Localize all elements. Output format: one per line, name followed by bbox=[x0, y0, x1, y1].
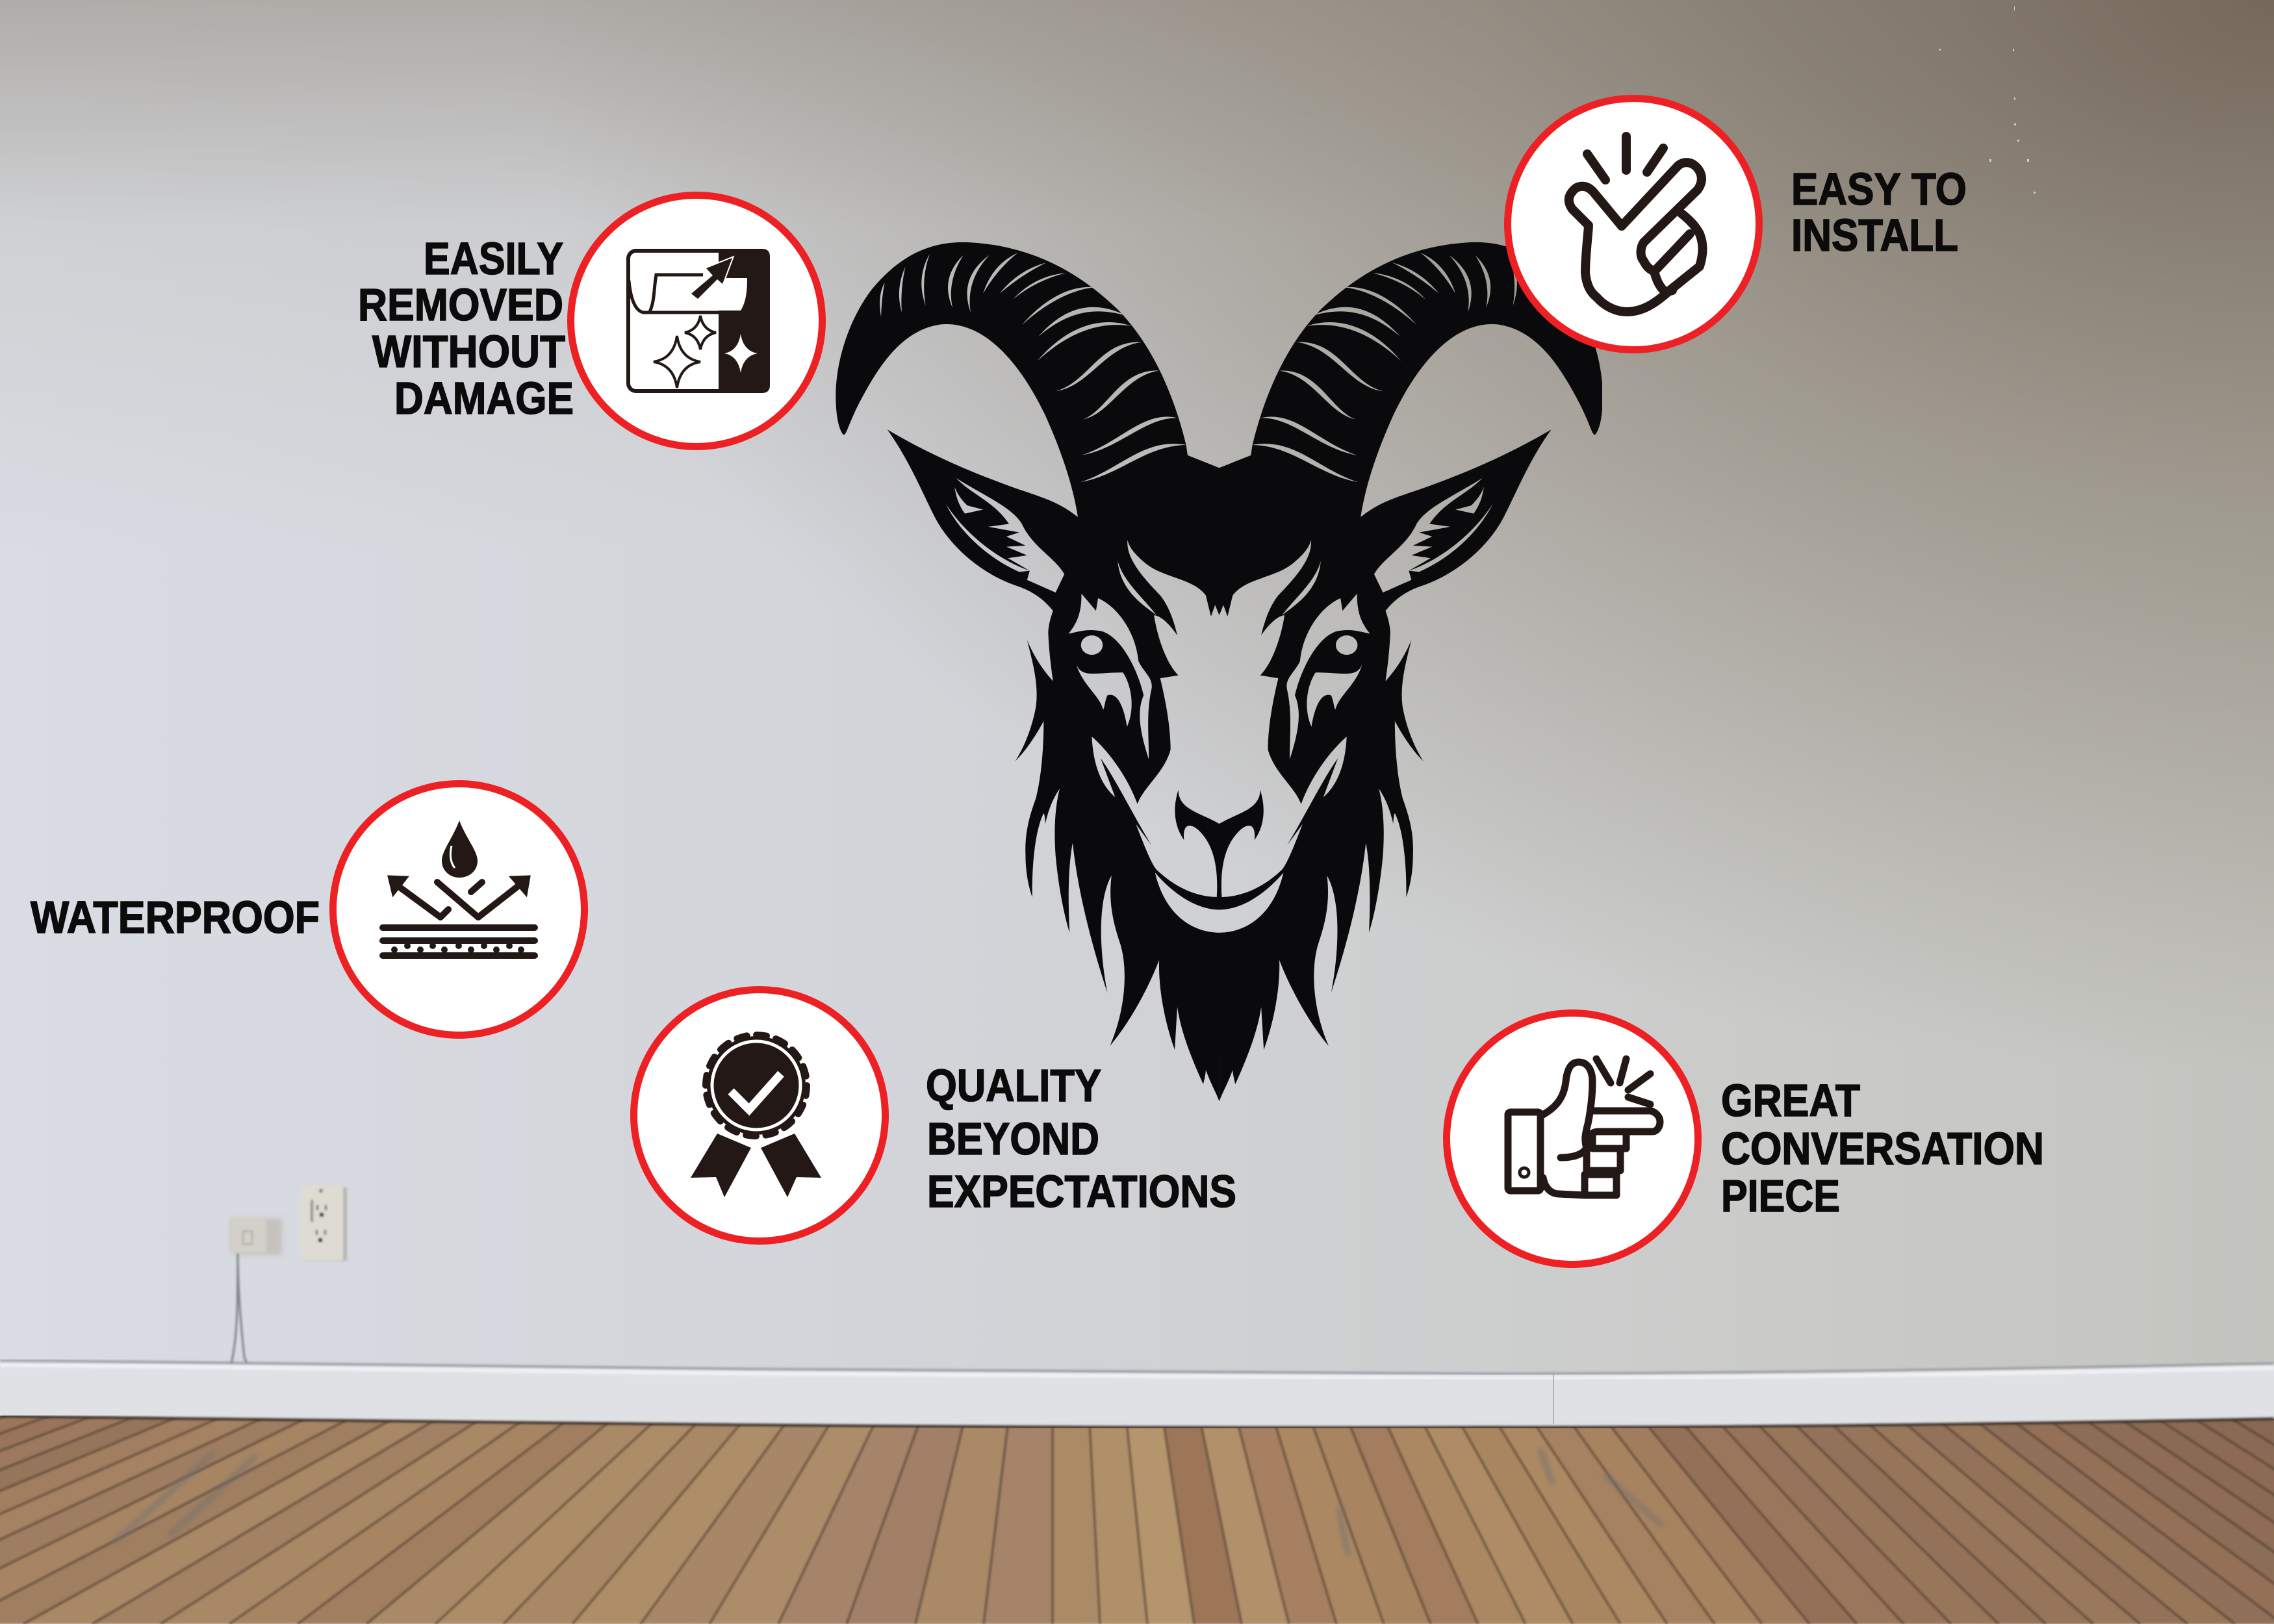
icon: award rosette bbox=[691, 1032, 821, 1197]
feature: quality beyond expectations bbox=[634, 990, 1236, 1241]
label: great conversation piece bbox=[1721, 1075, 2044, 1221]
label: easily removed without damage: REMOVED bbox=[358, 279, 563, 330]
badge circle bbox=[634, 990, 885, 1241]
label: great conversation piece: GREAT bbox=[1721, 1075, 1860, 1126]
badge circle bbox=[1507, 99, 1759, 349]
phone cord bbox=[231, 1254, 247, 1363]
label: easily removed without damage: EASILY bbox=[424, 233, 563, 284]
icon: peeling sticker bbox=[628, 249, 770, 393]
wall outlet and phone jack bbox=[229, 1186, 347, 1363]
phone jack box bbox=[229, 1217, 282, 1255]
label: easy to install: EASY TO bbox=[1791, 164, 1967, 214]
label: quality beyond expectations: BEYOND bbox=[927, 1113, 1099, 1164]
label: great conversation piece: PIECE bbox=[1721, 1171, 1840, 1221]
label: easily removed without damage: DAMAGE bbox=[394, 373, 574, 424]
goat head wall decal bbox=[836, 240, 1602, 1101]
label: waterproof: WATERPROOF bbox=[31, 892, 320, 943]
label: quality beyond expectations: QUALITY bbox=[926, 1060, 1101, 1111]
label: quality beyond expectations bbox=[926, 1060, 1236, 1217]
label: great conversation piece: CONVERSATION bbox=[1721, 1123, 2044, 1174]
badge circle bbox=[1446, 1013, 1698, 1264]
badge circle bbox=[570, 195, 823, 447]
wooden floor bbox=[0, 1410, 2274, 1624]
label: quality beyond expectations: EXPECTATIONS bbox=[927, 1166, 1236, 1217]
icon sparkles bbox=[685, 316, 716, 349]
icon: water repellent layers bbox=[383, 820, 535, 956]
feature: waterproof bbox=[31, 783, 585, 1035]
wall specks bbox=[1939, 6, 2036, 194]
label: easy to install bbox=[1791, 164, 1967, 260]
label: easily removed without damage: WITHOUT bbox=[372, 326, 565, 377]
baseboard bbox=[0, 1360, 2274, 1428]
power outlet bbox=[301, 1186, 347, 1261]
badge circle bbox=[333, 783, 585, 1035]
icon: finger gun hand bbox=[1508, 1059, 1660, 1195]
feature: great conversation piece bbox=[1446, 1013, 2044, 1264]
feature: easy to install bbox=[1507, 99, 1967, 349]
label: easily removed without damage bbox=[358, 233, 574, 424]
icon: finger snap bbox=[1569, 136, 1702, 312]
feature: easily removed bbox=[358, 195, 823, 447]
icon arrow bbox=[691, 258, 732, 299]
label: easy to install: INSTALL bbox=[1791, 210, 1958, 260]
